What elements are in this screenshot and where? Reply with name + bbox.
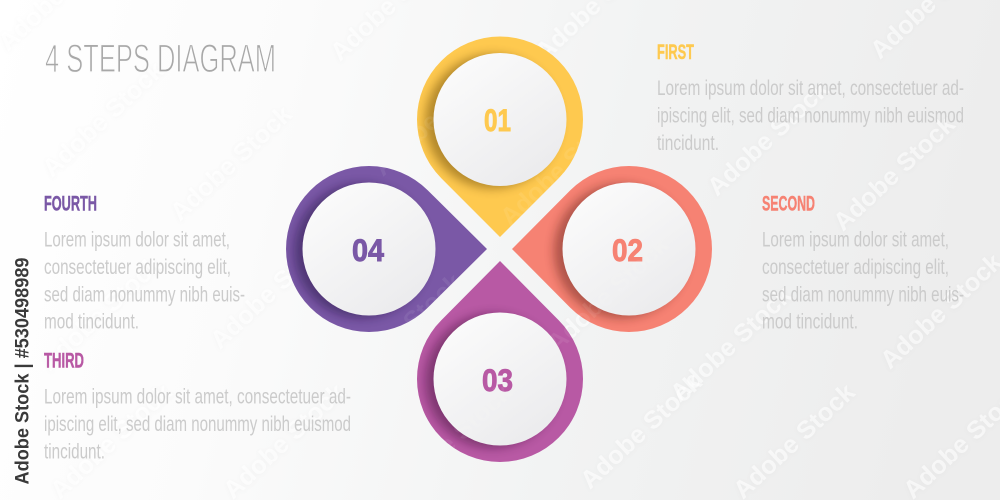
watermark pattern: Adobe Stock [575, 368, 708, 494]
watermark over pins: Adobe Stock [495, 105, 628, 231]
text block: third: THIRD [44, 348, 84, 372]
text block: first [657, 40, 964, 155]
text block: third: tincidunt. [44, 440, 105, 464]
stock id stamp: Adobe Stock | #530498989 [12, 257, 34, 484]
text block: third: Lorem ipsum dolor sit amet, consectetuer ad- [44, 384, 351, 408]
watermark over pins: Adobe Stock [368, 55, 501, 181]
text block: second [762, 192, 964, 334]
number 01: 01 [484, 102, 511, 138]
watermark pattern: Adobe Stock [37, 56, 170, 182]
text block: fourth: consectetuer adipiscing elit, [44, 255, 231, 279]
text block: first: FIRST [657, 40, 694, 64]
text block: fourth [44, 192, 245, 334]
step 02 pin [512, 166, 712, 332]
text block: second: mod tincidunt. [762, 310, 858, 334]
number 02: 02 [612, 232, 643, 268]
watermark pattern: Adobe Stock [702, 75, 835, 201]
title: 4 STEPS DIAGRAM [45, 37, 276, 81]
watermark pattern: Adobe Stock [165, 100, 298, 226]
watermark pattern: Adobe Stock [205, 228, 338, 354]
watermark pattern: Adobe Stock [35, 250, 168, 376]
step 04 pin [286, 166, 487, 332]
watermark over pins: Adobe Stock [542, 231, 675, 357]
text block: fourth: FOURTH [44, 192, 97, 216]
watermark pattern: Adobe Stock [542, 231, 675, 357]
watermark over pins [335, 55, 675, 500]
watermark over pins: Adobe Stock [335, 268, 468, 394]
step 03 pin [417, 261, 583, 462]
text block: first: tincidunt. [657, 131, 719, 155]
text block: third: ipiscing elit, sed diam nonummy nibh euismod [44, 412, 351, 436]
text block: third [44, 348, 351, 464]
watermark pattern: Adobe Stock [665, 281, 798, 407]
number 04: 04 [352, 232, 384, 268]
text block: fourth: mod tincidunt. [44, 310, 139, 334]
text block: second: SECOND [762, 192, 815, 216]
text block: fourth: Lorem ipsum dolor sit amet, [44, 228, 230, 252]
text block: fourth: sed diam nonummy nibh euis- [44, 282, 245, 306]
watermark pattern: Adobe Stock [828, 110, 961, 236]
step 01 pin [417, 37, 583, 237]
number 03: 03 [482, 362, 513, 398]
